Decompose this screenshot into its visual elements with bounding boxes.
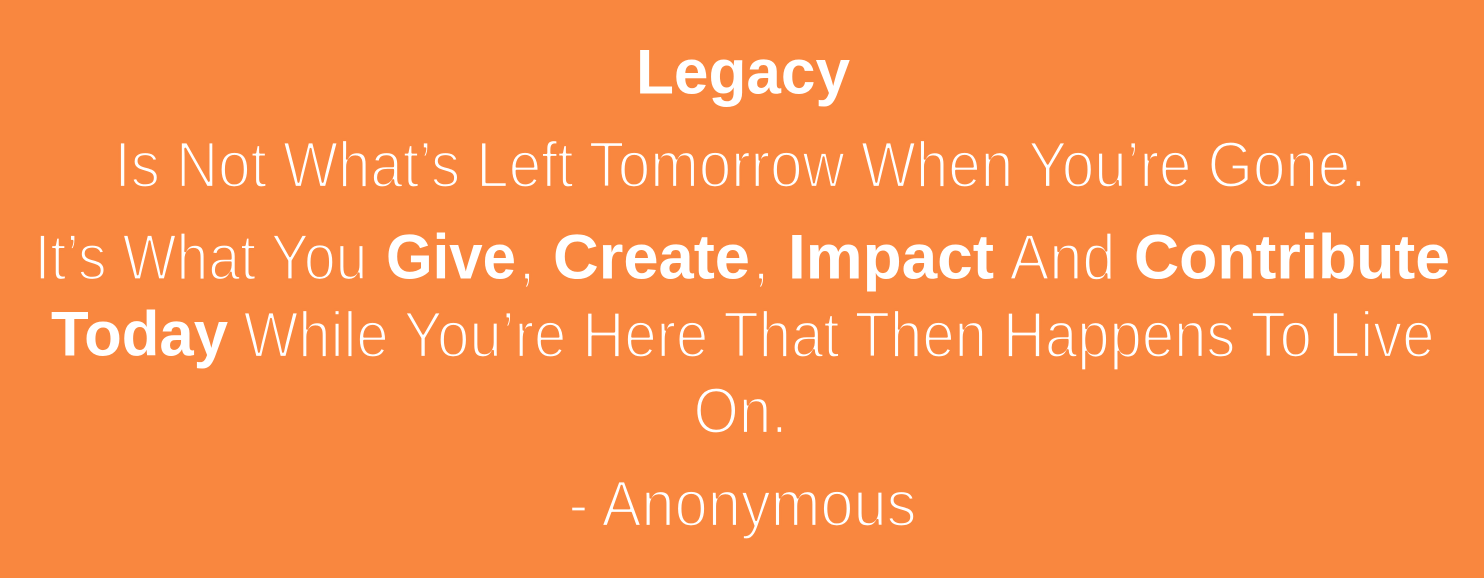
quote line 2: , (752, 220, 770, 294)
quote line 2: It’s What You (34, 220, 368, 294)
quote line 4: On. (694, 374, 788, 447)
quote line 2: And (1010, 220, 1116, 294)
quote line 2: Contribute (1134, 222, 1450, 292)
quote line 1: Is Not What’s Left Tomorrow When You’re Gone. (114, 128, 1366, 201)
quote line 2 (34, 220, 1450, 294)
quote line 2: Create (553, 222, 750, 292)
quote line 2: Give (386, 222, 516, 292)
attribution: - Anonymous (568, 467, 916, 540)
quote line 2: , (518, 220, 536, 294)
quote line 3: Today (51, 300, 228, 370)
quote line 2: Impact (788, 222, 994, 292)
heading: Legacy: Legacy (636, 38, 850, 108)
